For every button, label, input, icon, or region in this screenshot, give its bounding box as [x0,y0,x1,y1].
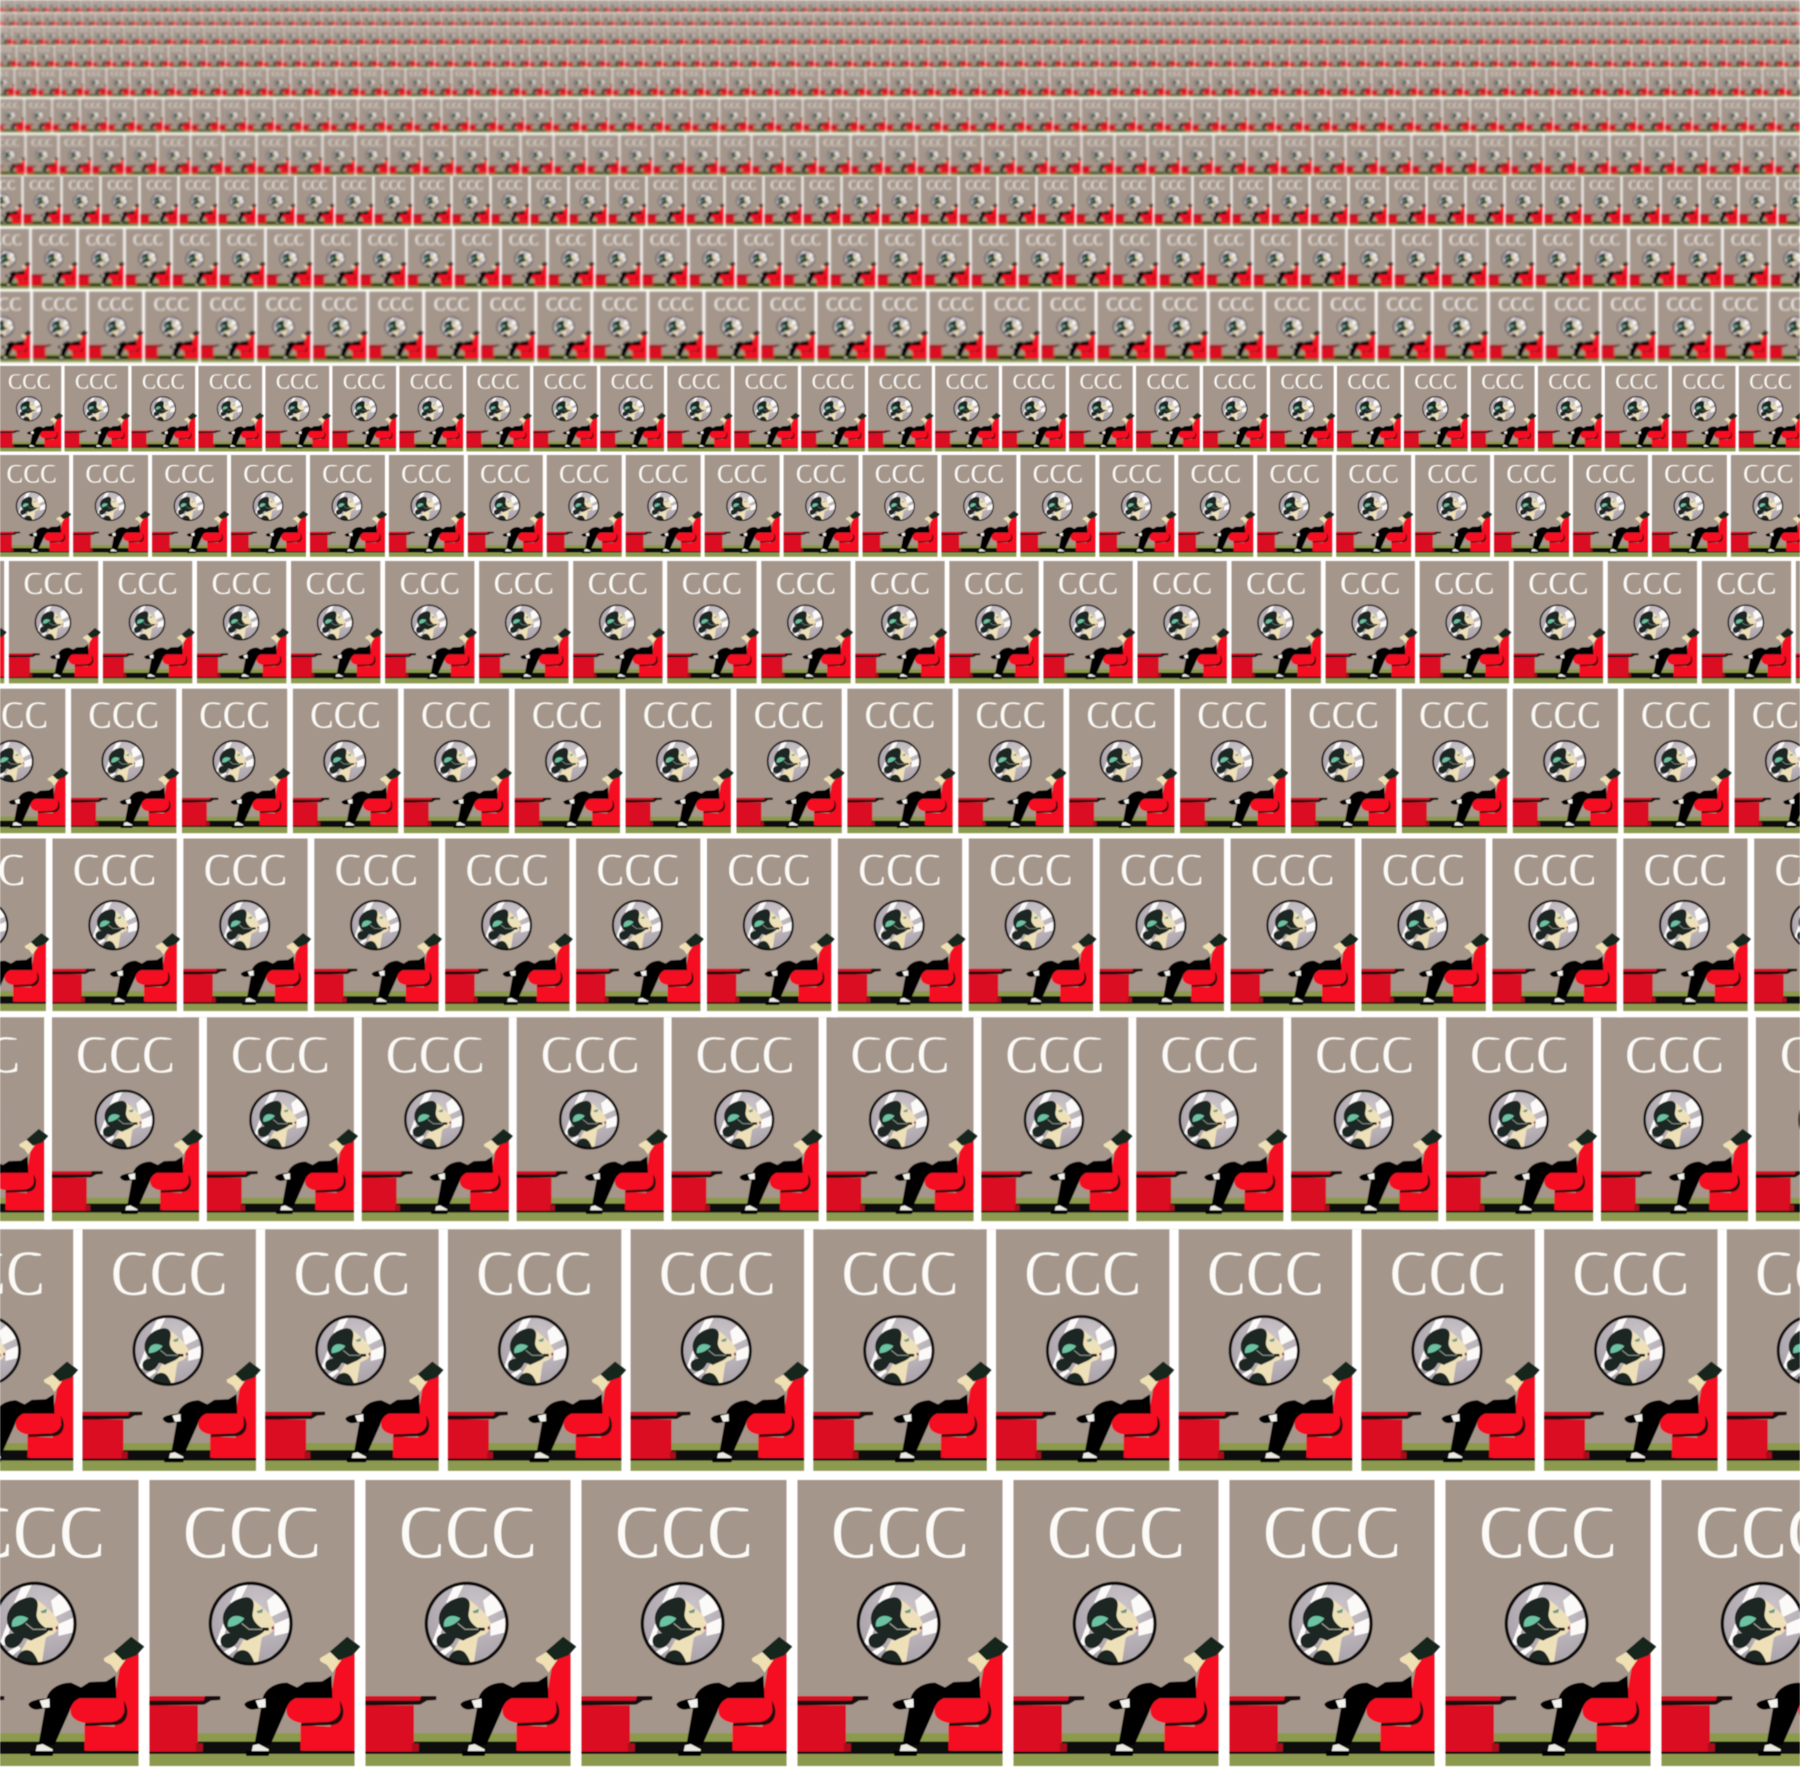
poster background [798,1480,1003,1766]
poster row 14 [0,69,1800,99]
raised foot [892,1698,914,1710]
poster row 7 [0,455,1800,561]
bottom floor band [798,1754,1003,1766]
black rug shadow [845,1742,952,1752]
book [978,1637,1008,1660]
shoe highlight [904,1699,914,1708]
poster row 3 [0,1017,1800,1229]
shoe sole [894,1751,917,1756]
poster row 4 [0,838,1800,1017]
hand [968,1652,989,1673]
seated figure [892,1637,1008,1756]
table [798,1696,868,1752]
poster row 9 [0,292,1800,366]
far rows of posters [0,176,1800,366]
poster row 10 [0,229,1800,292]
armchair [934,1653,1003,1751]
poster row 18 (farthest) [0,0,1800,13]
floor strip [845,1733,952,1743]
lips [920,1627,922,1629]
porthole portrait [858,1583,942,1667]
poster row 2 [0,1229,1800,1480]
poster row 11 [0,176,1800,229]
poster row 5 [0,689,1800,838]
eye [904,1609,911,1613]
trousers [902,1675,980,1745]
poster row 1 (nearest) [0,1480,1800,1771]
poster: centre tile of nearest row [806,1582,1008,1754]
face and neck [886,1599,923,1663]
poster row 6 [0,561,1800,689]
earpiece [876,1616,892,1627]
poster row 8 [0,366,1800,455]
near rows of posters [0,366,1800,1771]
poster row 17 [0,13,1800,27]
poster row 13 [0,99,1800,135]
title: CCC: CCC [831,1491,969,1574]
poster row 16 [0,27,1800,46]
headset wire [890,1623,912,1629]
light rays [864,1584,942,1667]
lower shoe [900,1744,917,1751]
hair [868,1597,913,1648]
farthest rows of posters [0,0,1800,176]
poster row 12 [0,135,1800,176]
poster row 15 [0,46,1800,69]
floor line [798,1751,1003,1754]
shoulder [880,1650,904,1667]
microphone [910,1628,917,1631]
